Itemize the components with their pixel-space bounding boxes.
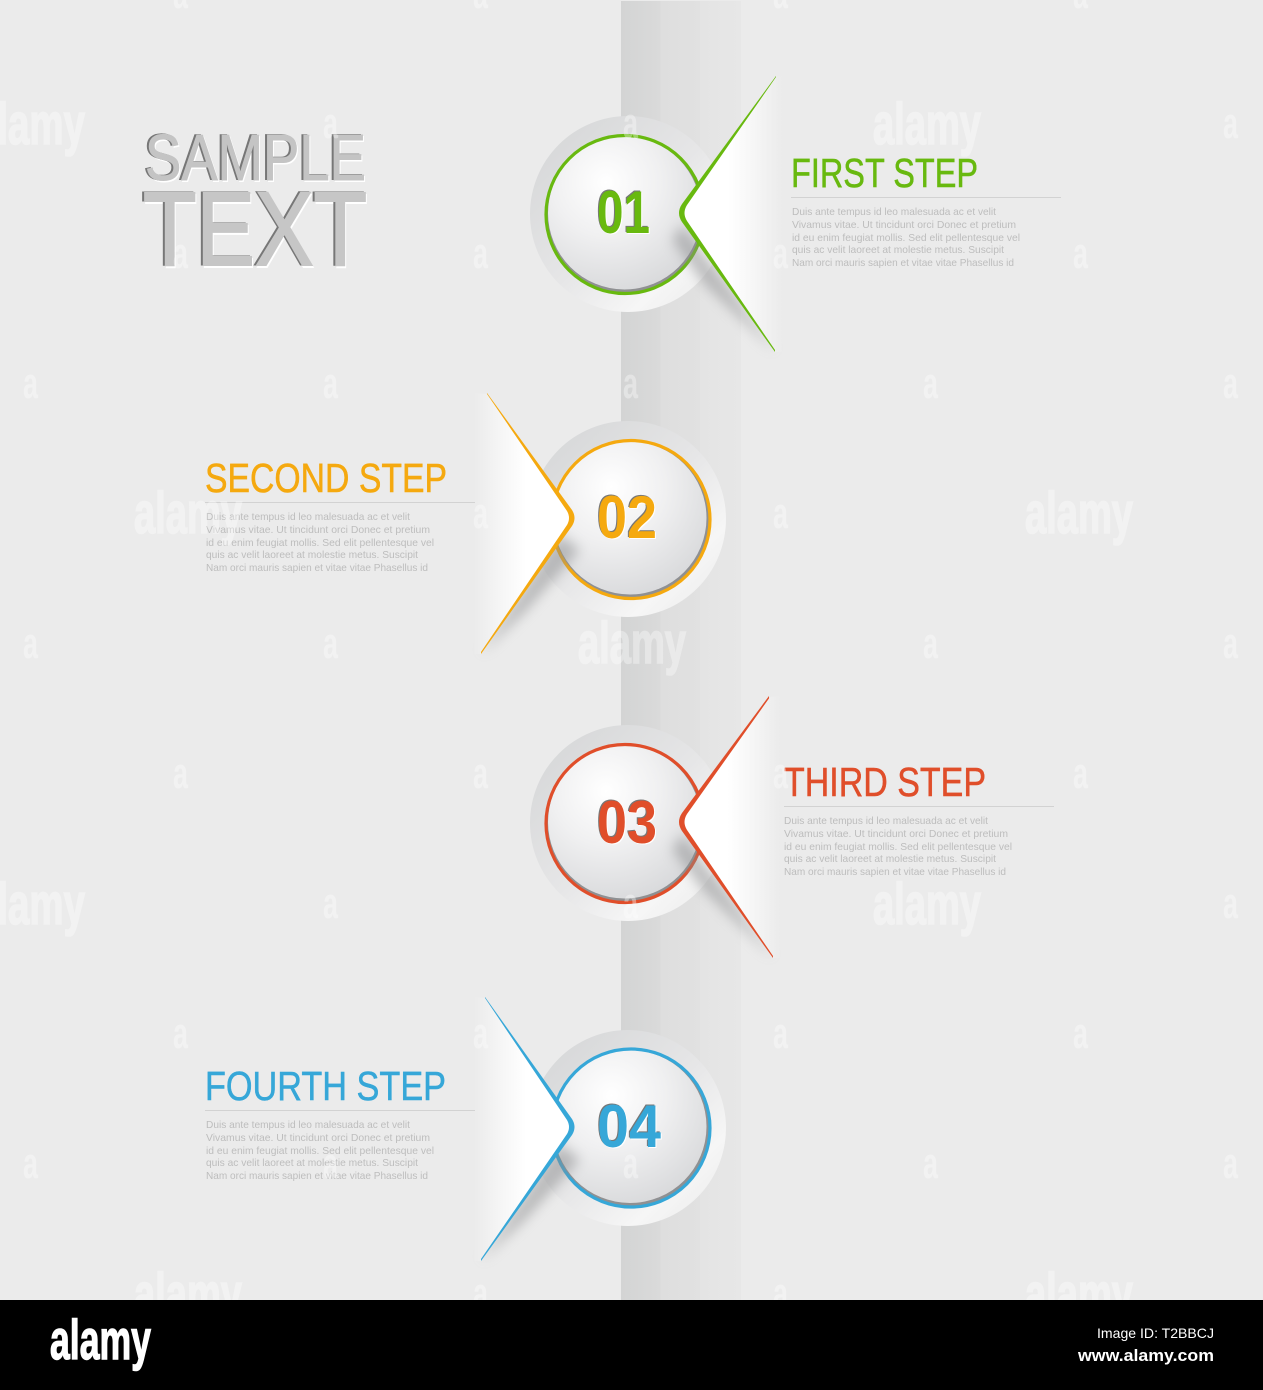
watermarks: alamy xyxy=(873,872,981,937)
step 4 body: quis ac velit laoreet at molestie metus. Suscipit xyxy=(206,1157,418,1169)
watermarks: a xyxy=(1073,749,1088,798)
step 3 body: Nam orci mauris sapien et vitae vitae Phasellus id xyxy=(784,866,1006,878)
watermarks: a xyxy=(173,1009,188,1058)
vertical timeline band xyxy=(621,1,741,1300)
title: sample text: SAMPLE xyxy=(145,121,366,194)
step 2 heading: SECOND STEP xyxy=(205,455,447,501)
watermarks: a xyxy=(773,1009,788,1058)
step 2 rule xyxy=(205,502,475,503)
title: sample text: TEXT xyxy=(144,173,368,290)
step 2 body: Nam orci mauris sapien et vitae vitae Phasellus id xyxy=(206,562,428,574)
step 1: first step xyxy=(530,76,1061,352)
watermarks: a xyxy=(473,749,488,798)
watermarks: a xyxy=(323,359,338,408)
step 3 body: Vivamus vitae. Ut tincidunt orci Donec et pretium xyxy=(784,828,1008,840)
watermarks: a xyxy=(173,229,188,278)
step 3 pointer xyxy=(672,696,780,958)
step 1 pointer xyxy=(672,76,782,352)
watermarks: a xyxy=(623,879,638,928)
watermarks: a xyxy=(773,749,788,798)
watermarks: a xyxy=(1073,229,1088,278)
step 1 body: Vivamus vitae. Ut tincidunt orci Donec et pretium xyxy=(792,219,1016,231)
watermarks: a xyxy=(773,1269,788,1318)
watermarks: alamy xyxy=(1025,1262,1133,1327)
step 3 rule xyxy=(784,806,1054,807)
watermarks: a xyxy=(23,1139,38,1188)
watermarks: a xyxy=(1223,359,1238,408)
watermarks: a xyxy=(323,1139,338,1188)
step 1 number: 01 xyxy=(596,178,649,245)
watermarks: a xyxy=(923,359,938,408)
step 1 body: id eu enim feugiat mollis. Sed elit pellentesque vel xyxy=(792,232,1020,244)
step 4 body: Vivamus vitae. Ut tincidunt orci Donec et pretium xyxy=(206,1132,430,1144)
step 1 body: quis ac velit laoreet at molestie metus. Suscipit xyxy=(792,244,1004,256)
step 3 body xyxy=(784,815,1012,878)
watermarks: a xyxy=(773,489,788,538)
step 1 body xyxy=(792,206,1020,269)
watermarks: alamy xyxy=(1025,481,1133,546)
watermarks: a xyxy=(623,1139,638,1188)
watermarks: a xyxy=(473,1269,488,1318)
step 1 body: Nam orci mauris sapien et vitae vitae Phasellus id xyxy=(792,257,1014,269)
step 1 number: 01 xyxy=(598,180,651,247)
step 4 body: Nam orci mauris sapien et vitae vitae Phasellus id xyxy=(206,1170,428,1182)
step 2 body: id eu enim feugiat mollis. Sed elit pellentesque vel xyxy=(206,537,434,549)
step 4 body: Duis ante tempus id leo malesuada ac et velit xyxy=(206,1119,410,1131)
step 2 pointer xyxy=(474,393,580,654)
step 4 body xyxy=(206,1119,434,1182)
title: sample text xyxy=(141,120,368,290)
step 4 number: 04 xyxy=(596,1092,661,1159)
step 3 heading: THIRD STEP xyxy=(784,759,986,805)
step 2 body xyxy=(206,511,434,574)
footer logo: alamy xyxy=(50,1308,151,1371)
watermarks: a xyxy=(1223,99,1238,148)
step 1 number: 01 xyxy=(597,179,650,246)
step 1 rule xyxy=(791,197,1061,198)
title: sample text: TEXT xyxy=(141,170,365,288)
watermarks: a xyxy=(323,99,338,148)
watermarks: a xyxy=(323,879,338,928)
step 2 number: 02 xyxy=(597,484,657,551)
watermarks: a xyxy=(1223,619,1238,668)
step 4 rule xyxy=(205,1110,475,1111)
watermarks: a xyxy=(623,359,638,408)
watermarks: a xyxy=(1223,879,1238,928)
step 1 body: Duis ante tempus id leo malesuada ac et velit xyxy=(792,206,996,218)
step 3 body: Duis ante tempus id leo malesuada ac et velit xyxy=(784,815,988,827)
watermarks: a xyxy=(473,489,488,538)
step 2 number: 02 xyxy=(596,483,656,550)
watermarks: a xyxy=(623,99,638,148)
title: sample text: TEXT xyxy=(143,171,367,288)
step 3: third step xyxy=(530,696,1054,958)
footer url: www.alamy.com xyxy=(1077,1346,1214,1365)
step 2: second step xyxy=(205,393,726,654)
watermarks: a xyxy=(923,1139,938,1188)
watermarks: alamy xyxy=(873,92,981,157)
step 3 number: 03 xyxy=(596,788,656,855)
watermarks: a xyxy=(23,359,38,408)
step 3 body: quis ac velit laoreet at molestie metus. Suscipit xyxy=(784,853,996,865)
watermarks: a xyxy=(923,619,938,668)
step 4 badge xyxy=(530,1030,726,1226)
step 4 number: 04 xyxy=(597,1093,662,1160)
step 4 pointer xyxy=(474,997,580,1261)
step 3 number: 03 xyxy=(597,789,657,856)
step 2 body: quis ac velit laoreet at molestie metus. Suscipit xyxy=(206,549,418,561)
watermarks: a xyxy=(473,229,488,278)
step 2 body: Vivamus vitae. Ut tincidunt orci Donec et pretium xyxy=(206,524,430,536)
step 4: fourth step xyxy=(205,997,726,1261)
title: sample text: SAMPLE xyxy=(143,120,364,194)
step 4 body: id eu enim feugiat mollis. Sed elit pellentesque vel xyxy=(206,1145,434,1157)
step 3 badge xyxy=(530,725,726,921)
watermarks: alamy xyxy=(134,1262,242,1327)
watermarks: a xyxy=(773,229,788,278)
watermarks: a xyxy=(23,619,38,668)
watermarks: a xyxy=(1073,1009,1088,1058)
watermarks: a xyxy=(473,1009,488,1058)
watermarks: alamy xyxy=(578,611,686,676)
step 4 number: 04 xyxy=(598,1094,663,1161)
title: sample text: SAMPLE xyxy=(146,122,367,196)
watermarks: a xyxy=(323,619,338,668)
step 2 body: Duis ante tempus id leo malesuada ac et velit xyxy=(206,511,410,523)
footer bar xyxy=(0,1300,1263,1390)
image id: Image ID: T2BBCJ xyxy=(1097,1325,1214,1341)
step 1 badge xyxy=(530,116,726,312)
watermarks: a xyxy=(1223,1139,1238,1188)
watermarks: a xyxy=(173,749,188,798)
step 1 heading: FIRST STEP xyxy=(791,150,978,196)
step 3 number: 03 xyxy=(598,790,658,857)
watermarks: alamy xyxy=(134,481,242,546)
step 4 heading: FOURTH STEP xyxy=(205,1063,446,1109)
step 2 number: 02 xyxy=(598,485,658,552)
step 2 badge xyxy=(530,421,726,617)
step 3 body: id eu enim feugiat mollis. Sed elit pellentesque vel xyxy=(784,841,1012,853)
